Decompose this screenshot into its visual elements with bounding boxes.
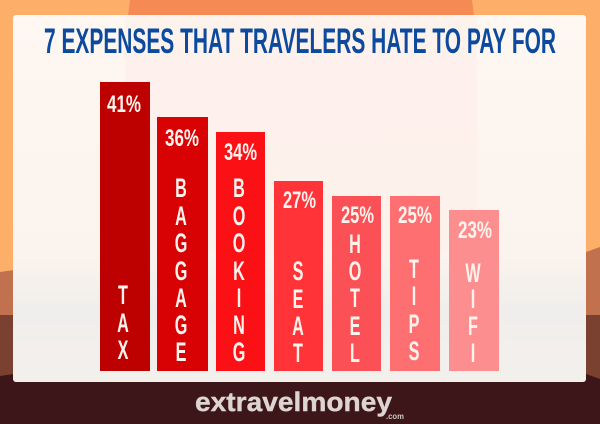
- bar: baggage 36%: G: [175, 256, 187, 286]
- bar: wifi 23%: I: [471, 338, 475, 368]
- bar: tax 41%: T: [118, 280, 128, 310]
- logo: extravelmoney.com: .com: [386, 412, 404, 421]
- bar: baggage 36%: B: [175, 173, 187, 203]
- bar: booking 34%: 34%: [224, 139, 257, 166]
- bar: hotel 25%: E: [350, 311, 360, 341]
- bar: baggage 36%: [157, 117, 208, 371]
- bar: hotel 25%: 25%: [341, 202, 374, 229]
- bar: booking 34%: I: [237, 283, 241, 313]
- sun glow through panel: [125, 15, 477, 250]
- bar: wifi 23%: [449, 210, 499, 371]
- bar: baggage 36%: A: [175, 201, 187, 231]
- bar: hotel 25%: H: [349, 229, 361, 259]
- bar: seat 27%: S: [293, 256, 303, 286]
- logo: extravelmoney.com: extravelmoney: [195, 387, 392, 417]
- bar: booking 34%: N: [233, 310, 245, 340]
- bar: baggage 36%: A: [175, 283, 187, 313]
- bar: baggage 36%: G: [175, 310, 187, 340]
- bar: tax 41%: [100, 82, 150, 371]
- bar: wifi 23%: 23%: [458, 217, 492, 244]
- bar: hotel 25%: [332, 196, 381, 371]
- bar: booking 34%: K: [233, 256, 245, 286]
- bar: tips 25%: 25%: [398, 202, 432, 229]
- bar: tips 25%: T: [409, 254, 419, 284]
- bar: seat 27%: A: [292, 311, 304, 341]
- bar: tax 41%: X: [118, 335, 129, 365]
- bar: seat 27%: 27%: [283, 187, 316, 214]
- bar: seat 27%: T: [293, 338, 303, 368]
- bar: seat 27%: [274, 181, 323, 371]
- bar: booking 34%: G: [233, 337, 245, 367]
- bar: booking 34%: O: [233, 201, 245, 231]
- bar: hotel 25%: O: [349, 256, 361, 286]
- bar: baggage 36%: E: [176, 337, 186, 367]
- bar: hotel 25%: L: [350, 338, 360, 368]
- bar: wifi 23%: W: [465, 258, 481, 288]
- bar: tips 25%: S: [409, 336, 419, 366]
- bar: wifi 23%: F: [468, 311, 478, 341]
- bar: tips 25%: [390, 196, 440, 371]
- bar: booking 34%: B: [233, 173, 245, 203]
- bar: tips 25%: P: [409, 309, 420, 339]
- bar: baggage 36%: 36%: [165, 125, 199, 152]
- bar: tax 41%: A: [117, 308, 129, 338]
- bar: hotel 25%: T: [350, 283, 360, 313]
- bar: seat 27%: E: [293, 284, 303, 314]
- bar: wifi 23%: I: [471, 284, 475, 314]
- bar: booking 34%: O: [233, 228, 245, 258]
- bar: baggage 36%: G: [175, 228, 187, 258]
- bar: booking 34%: [216, 132, 265, 371]
- bar: tips 25%: I: [412, 281, 416, 311]
- bar: tax 41%: 41%: [107, 91, 141, 118]
